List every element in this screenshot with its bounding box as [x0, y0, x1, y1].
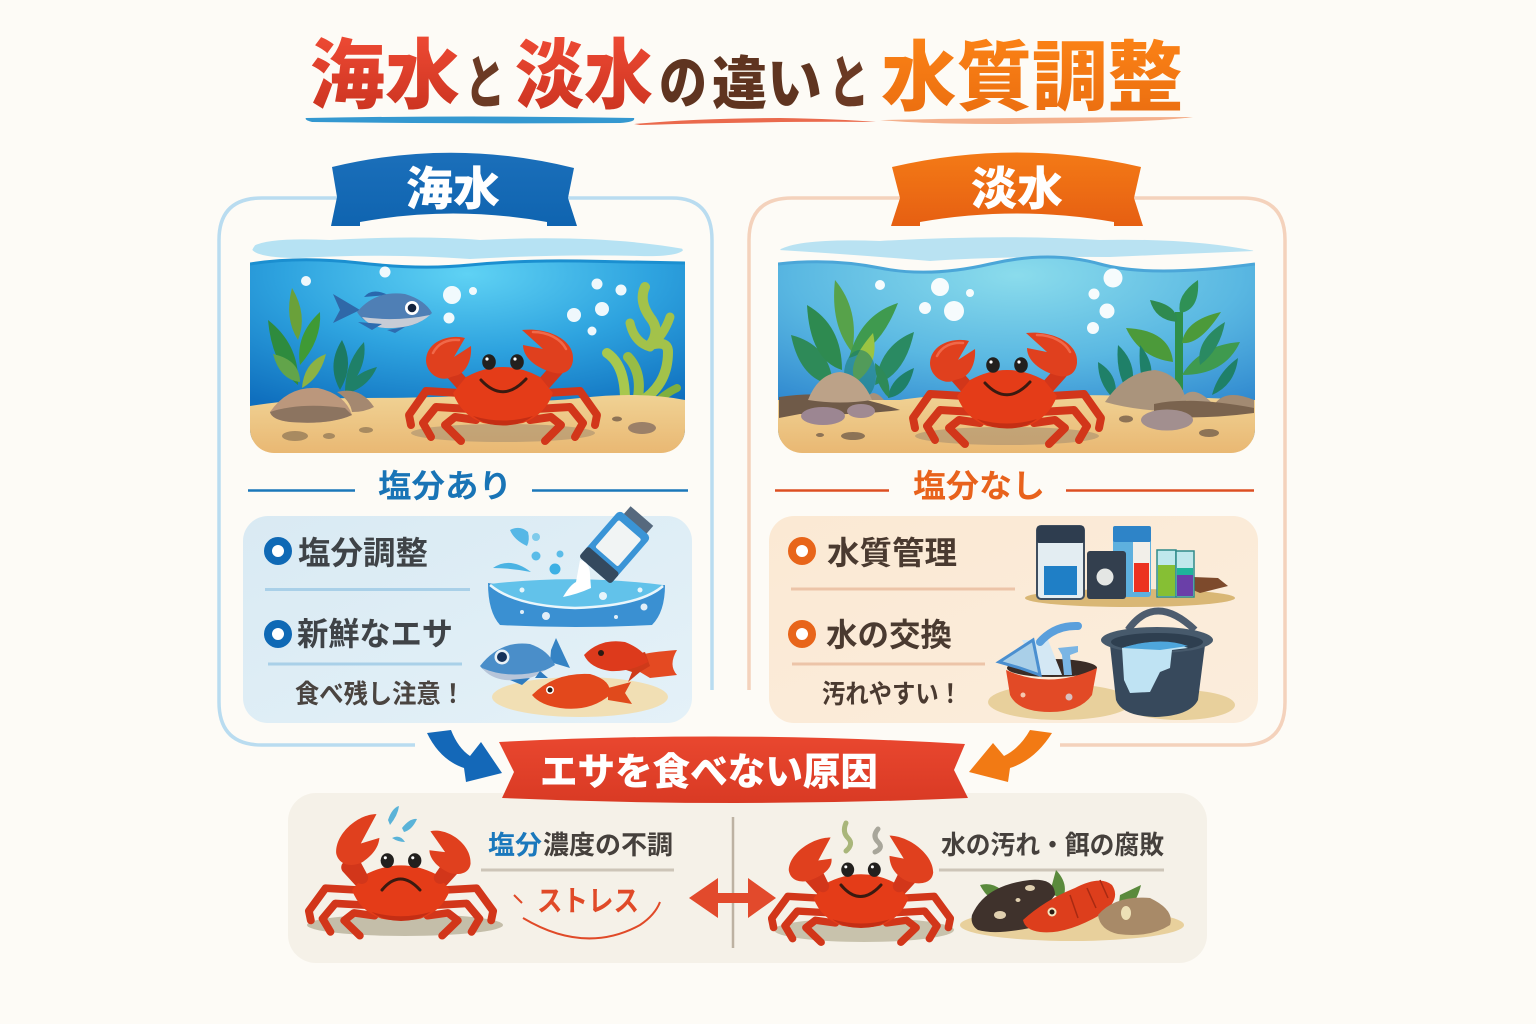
banner: 淡水: 淡水: [971, 163, 1063, 215]
sand: [778, 394, 1255, 453]
panel outline: freshwater: [749, 198, 1285, 745]
water: [778, 257, 1255, 440]
water surface: [779, 237, 1255, 261]
panel: seawater: [219, 153, 712, 745]
icon: sweat drops: [388, 806, 417, 842]
crab: freshwater: [913, 333, 1101, 445]
arrow: seawater to causes: [427, 730, 502, 782]
banner: 海水: 海水: [406, 163, 500, 215]
crab: stressed: [307, 814, 503, 936]
heading: salt concentration imbalance: 塩分: [488, 830, 542, 860]
bullet: 水の交換: 水の交換: [826, 617, 952, 653]
icon: bowl and bucket: [988, 611, 1235, 720]
icon: rotting food: [960, 870, 1184, 941]
icon: stink wisps: [844, 823, 880, 852]
note: overfeeding caution: 食べ残し注意！: [295, 679, 465, 709]
water surface: [251, 238, 684, 259]
title: の: [659, 51, 707, 116]
icon: water test kit: [1025, 526, 1235, 607]
seaweed right: [607, 287, 677, 407]
banner: causes of not eating: エサを食べない原因: [540, 752, 878, 794]
panel outline: seawater: [219, 198, 712, 745]
info panel: freshwater care: [769, 516, 1258, 723]
banner: 淡水: [891, 152, 1143, 226]
info panel: seawater care: [243, 502, 692, 723]
title: と: [465, 51, 505, 116]
title: 淡水: [515, 34, 653, 119]
heading: 塩分なし: 塩分なし: [913, 468, 1045, 504]
banner: causes of not eating: [499, 736, 968, 803]
plants left: [791, 280, 914, 400]
rocks: [779, 370, 1254, 440]
scene: sea aquarium: [250, 238, 685, 453]
divider: [732, 817, 734, 948]
label: stress: ストレス: [537, 886, 639, 918]
panel: freshwater: [749, 152, 1285, 745]
title: 水質調整: [881, 36, 1183, 121]
water: [250, 260, 685, 440]
title: [310, 34, 1183, 121]
panel: causes: [288, 793, 1207, 963]
fish: [333, 291, 432, 333]
title underline strokes: [306, 116, 1193, 125]
plants right: [1098, 280, 1240, 400]
title: 違い: [712, 52, 822, 117]
double-headed arrow: [689, 878, 776, 918]
seaweed left: [268, 288, 377, 394]
banner: 海水: [331, 153, 577, 226]
bullet: 塩分調整: 塩分調整: [298, 535, 428, 571]
rocks: [270, 388, 656, 441]
arrow: freshwater to causes: [969, 730, 1052, 782]
heading: 塩分あり: 塩分あり: [378, 468, 512, 504]
bubbles: [301, 266, 626, 336]
bubbles: [875, 268, 1122, 334]
label: stress: [514, 886, 660, 938]
bullet: 新鮮なエサ: 新鮮なエサ: [297, 616, 453, 652]
note: gets dirty easily: 汚れやすい！: [822, 679, 962, 709]
icon: fresh feed: [480, 638, 677, 717]
bullet: 水質管理: 水質管理: [827, 535, 957, 571]
heading: salt concentration imbalance: 濃度の不調: [543, 830, 673, 860]
heading: dirty water and rotting food: 水の汚れ・餌の腐敗: [941, 830, 1164, 860]
sand: [250, 395, 685, 453]
title: と: [829, 51, 869, 116]
title: 海水: [310, 34, 460, 119]
crab: smell: [772, 836, 954, 942]
icon: salt pouring into water: [488, 502, 665, 627]
crab: sea: [409, 330, 597, 442]
scene: freshwater aquarium: [778, 237, 1255, 453]
